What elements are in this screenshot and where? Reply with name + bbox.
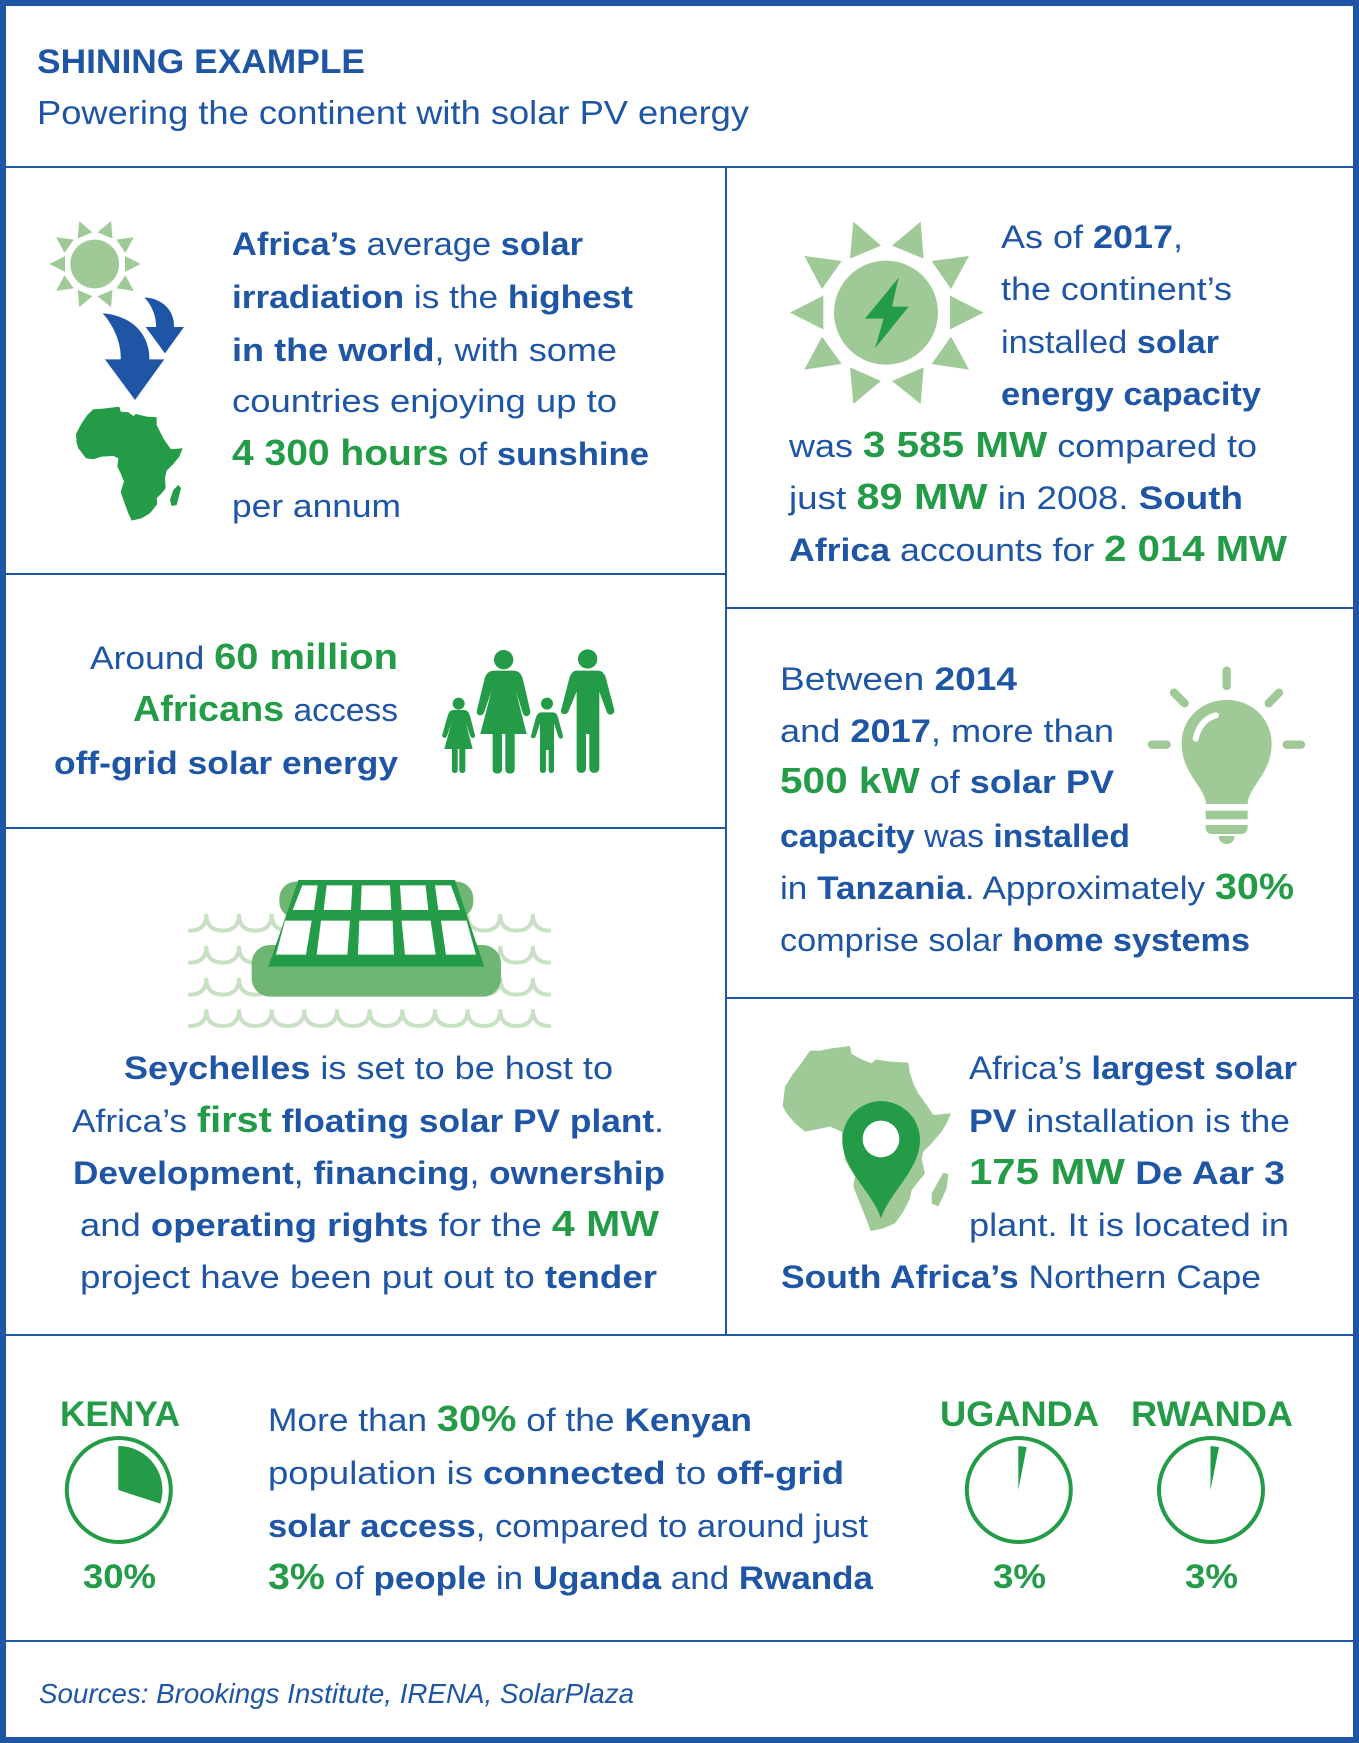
icon: Africa map with pin	[783, 1046, 951, 1231]
text: off-grid	[54, 636, 398, 781]
text: Tanzania	[780, 661, 1294, 958]
chart: Uganda	[940, 1395, 1099, 1596]
icon: family	[442, 649, 614, 774]
chart: Uganda: UGANDA	[940, 1395, 1099, 1434]
sources: Sources: Brookings Institute, IRENA, SolarPlaza	[39, 1678, 634, 1709]
text: De Aar: PV installation is the	[969, 1103, 1290, 1139]
text: capacity: the continent’s	[1001, 271, 1232, 307]
chart: Kenya: 30%	[83, 1558, 156, 1596]
icon: sun with lightning bolt	[790, 222, 984, 404]
text: capacity	[788, 219, 1287, 569]
text: Kenya comparison: population is connected to off-grid	[268, 1455, 844, 1491]
panel: solar irradiation	[6, 167, 726, 574]
text: off-grid: Around 60 million	[90, 636, 398, 677]
panel: country comparison	[6, 1336, 1353, 1641]
text: irradiation: 4 300 hours of sunshine	[232, 432, 649, 473]
text: off-grid: off-grid solar energy	[54, 745, 398, 781]
panel: installed capacity	[727, 167, 1353, 608]
text: Seychelles: Seychelles is set to be host to	[124, 1050, 613, 1086]
text: capacity: installed solar	[1001, 324, 1219, 360]
panel: off-grid access	[6, 575, 726, 828]
chart: Uganda: 3%	[993, 1558, 1046, 1596]
text: Tanzania: 500 kW of solar PV	[780, 760, 1115, 801]
text: irradiation: countries enjoying up to	[232, 383, 617, 419]
icon: arrows	[103, 297, 184, 400]
panel: Seychelles	[6, 829, 726, 1335]
text: Kenya comparison: 3% of people in Uganda and Rwanda	[268, 1556, 873, 1597]
text: Kenya comparison: More than 30% of the Kenyan	[268, 1398, 752, 1439]
icon: floating solar panel	[190, 880, 549, 1026]
text: Seychelles: and operating rights for the 4 MW	[80, 1203, 659, 1244]
text: capacity: was 3 585 MW compared to	[788, 424, 1257, 465]
text: irradiation: irradiation is the highest	[232, 279, 633, 315]
text: De Aar: South Africa’s Northern Cape	[781, 1259, 1261, 1295]
title block	[6, 6, 1353, 167]
text: Seychelles	[72, 1050, 665, 1295]
text: irradiation: per annum	[232, 488, 401, 524]
icon: light bulb	[1152, 671, 1301, 844]
panel: Tanzania	[727, 609, 1353, 998]
icon: Africa map	[76, 407, 183, 521]
text: Tanzania: capacity was installed	[780, 818, 1130, 854]
chart: Rwanda	[1131, 1395, 1293, 1596]
chart: Rwanda: 3%	[1185, 1558, 1238, 1596]
panel: De Aar plant	[727, 999, 1353, 1335]
text: De Aar: 175 MW De Aar 3	[969, 1151, 1285, 1192]
text: Kenya comparison: solar access , compared to around just	[268, 1508, 868, 1544]
text: capacity: As of 2017 ,	[1001, 219, 1183, 255]
text: capacity: Africa accounts for 2 014 MW	[789, 528, 1287, 569]
subtitle: Powering the continent with solar PV energy	[37, 94, 750, 131]
text: De Aar: plant. It is located in	[969, 1207, 1289, 1243]
text: irradiation: in the world , with some	[232, 332, 617, 368]
text: Seychelles: project have been put out to tender	[80, 1259, 657, 1295]
text: Tanzania: Between 2014	[780, 661, 1017, 697]
text: capacity: just 89 MW in 2008. South	[788, 476, 1243, 517]
text: Seychelles: Development , financing , ownership	[73, 1155, 665, 1191]
text: irradiation: Africa’s average solar	[232, 226, 583, 262]
text: off-grid: Africans access	[133, 688, 398, 729]
heading: SHINING EXAMPLE	[37, 43, 365, 81]
icon: small sun	[49, 221, 141, 307]
text: Tanzania: and 2017 , more than	[780, 713, 1114, 749]
chart: Kenya: KENYA	[60, 1395, 180, 1434]
text: Tanzania: comprise solar home systems	[780, 922, 1250, 958]
text: Kenya comparison	[268, 1398, 873, 1597]
icon: sun with arrows and Africa	[49, 221, 184, 521]
chart: Rwanda: RWANDA	[1131, 1395, 1293, 1434]
text: irradiation	[232, 226, 649, 524]
chart: Kenya	[60, 1395, 180, 1596]
text: capacity: energy capacity	[1001, 376, 1261, 412]
text: Seychelles: Africa’s first floating solar PV plant .	[72, 1099, 664, 1140]
text: De Aar	[781, 1050, 1297, 1295]
text: De Aar: Africa’s largest solar	[969, 1050, 1297, 1086]
text: Tanzania: in Tanzania . Approximately 30%	[780, 866, 1294, 907]
